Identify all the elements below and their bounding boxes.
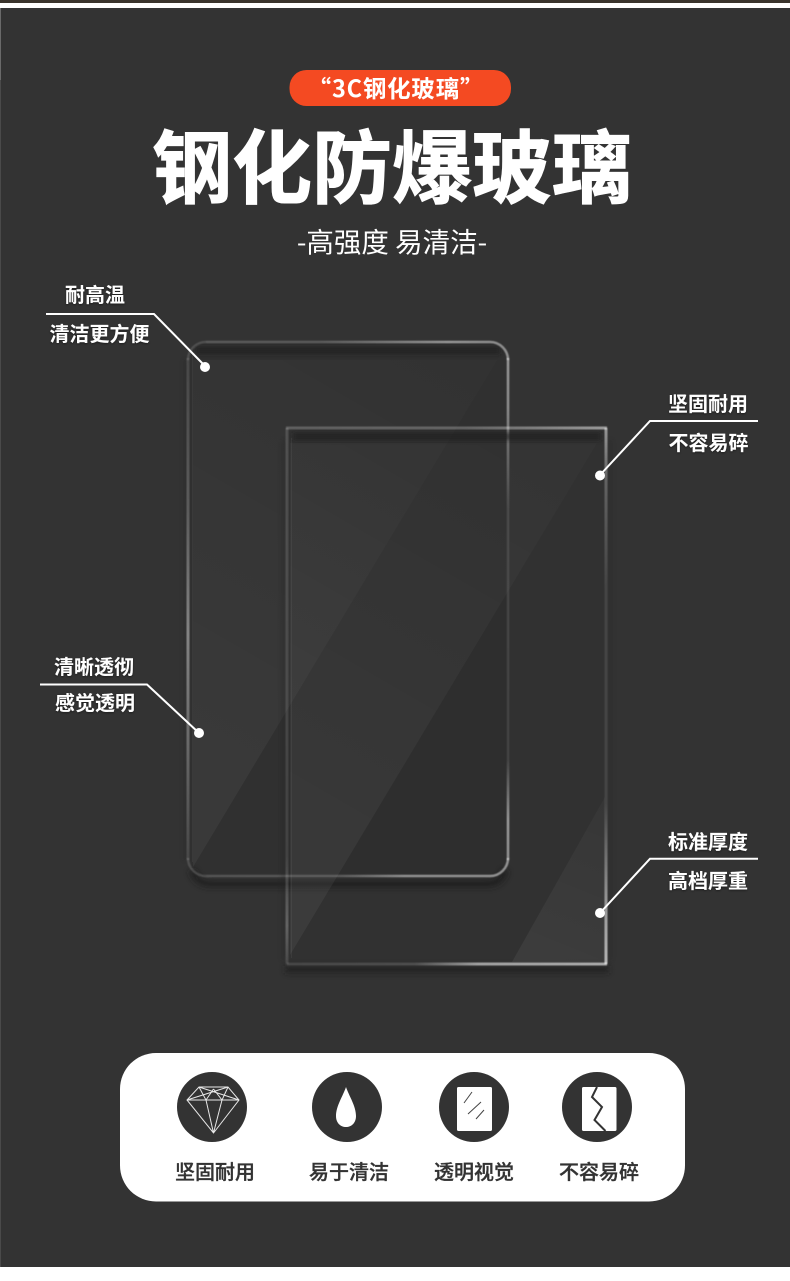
callout: bottom right: 标准厚度 (668, 826, 748, 855)
label: transparent view: 透明视觉 (434, 1156, 514, 1185)
icon: cracked glass (562, 1072, 632, 1142)
callout: bottom right: 高档厚重 (668, 865, 748, 894)
panel: feature icons (120, 1053, 685, 1202)
title: 钢化防爆玻璃 (152, 105, 632, 221)
icon: transparent glass (439, 1072, 509, 1142)
icon: diamond (177, 1072, 247, 1142)
callout: top right: 坚固耐用 (668, 388, 748, 417)
callout: top left: 耐高温 (65, 279, 125, 308)
callout: bottom right (595, 826, 758, 918)
glass panel: square front pane (282, 428, 612, 973)
callout: middle left: 感觉透明 (55, 687, 135, 716)
callout: top left: 清洁更方便 (50, 318, 150, 347)
icon: water drop (312, 1072, 382, 1142)
label: easy to clean: 易于清洁 (309, 1156, 389, 1185)
callout: top right (595, 388, 758, 480)
badge: 3C tempered glass: “3C钢化玻璃” (308, 70, 484, 104)
label: not fragile: 不容易碎 (559, 1156, 639, 1185)
callout: middle left (40, 651, 204, 738)
subtitle: -高强度 易清洁- (297, 220, 487, 260)
callout: top left (46, 279, 210, 372)
callout: top right: 不容易碎 (668, 427, 748, 456)
glass panel: rounded back pane (184, 342, 508, 884)
label: sturdy: 坚固耐用 (175, 1156, 255, 1185)
callout: middle left: 清晰透彻 (54, 651, 134, 680)
